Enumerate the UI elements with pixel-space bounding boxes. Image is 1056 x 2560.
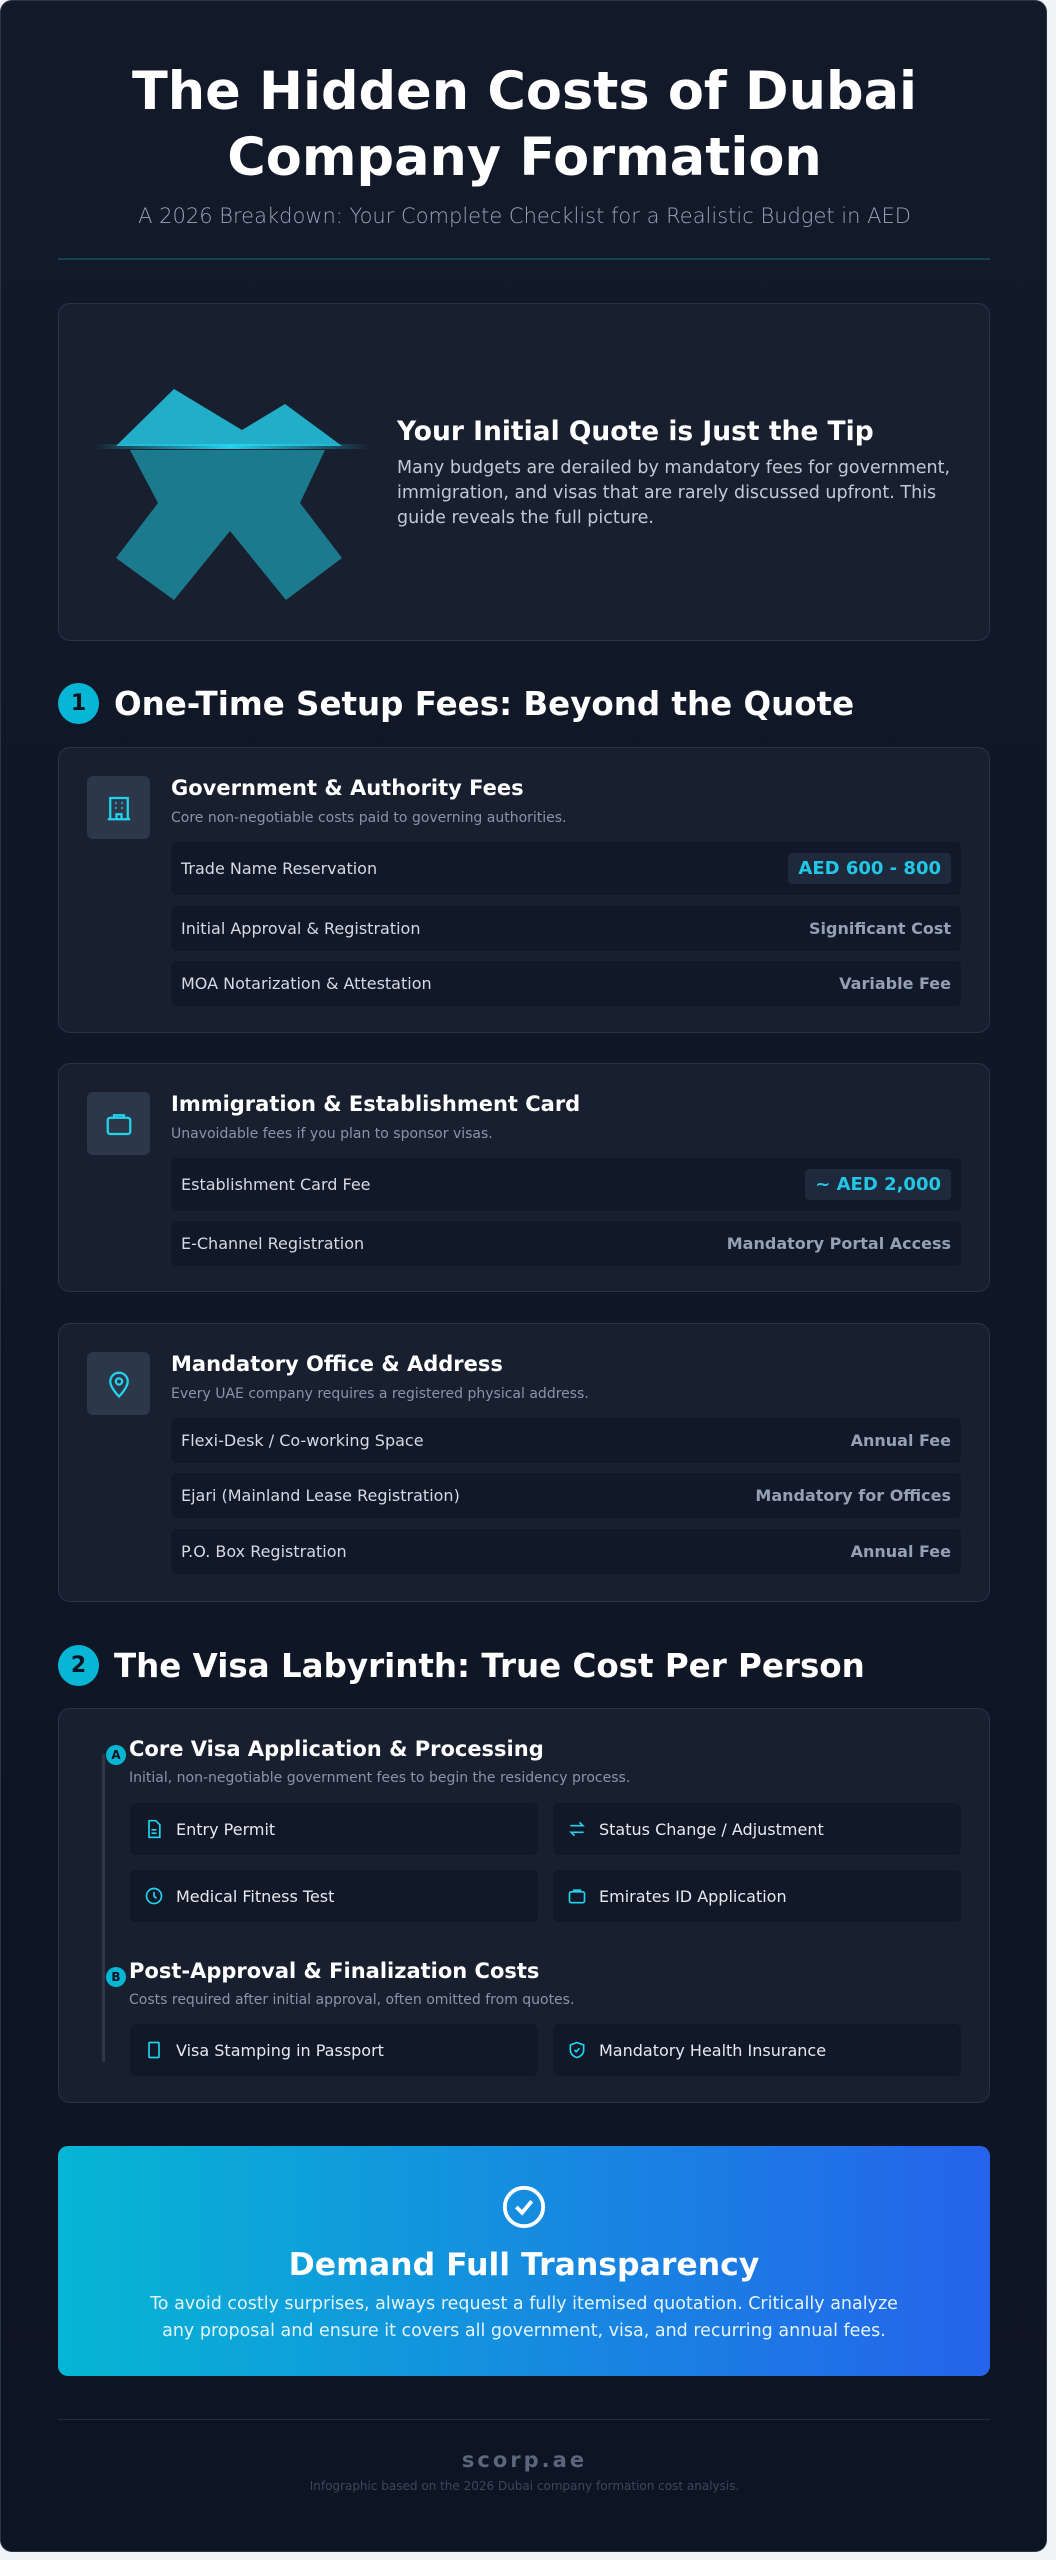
panel: immigration [58, 1063, 990, 1292]
footer: scorp.ae [462, 2448, 587, 2472]
subtitle: A 2026 Breakdown: Your Complete Checklist for a Realistic Budget in AED [138, 204, 911, 228]
panel: immigration: Establishment Card Fee [181, 1175, 371, 1194]
callout: transparency: Demand Full Transparency [289, 2247, 759, 2283]
panel: immigration: E-Channel Registration [181, 1234, 364, 1253]
hero text: Many budgets are derailed by mandatory fees for government, immigration, and visas that are rarely discussed upfront. This guide reveals the full picture. [397, 458, 950, 528]
title: The Hidden Costs of Dubai [132, 61, 917, 122]
icon: briefcase [87, 1092, 150, 1155]
icon: check [502, 2186, 546, 2228]
panel: government fees: Trade Name Reservation [181, 859, 377, 878]
panel: visa: Entry Permit [176, 1820, 275, 1838]
panel: visa: Mandatory Health Insurance [599, 2040, 826, 2060]
panel: visa: Status Change / Adjustment [599, 1820, 824, 1838]
panel: hero [58, 303, 990, 641]
panel: government fees: AED 600 - 800 [798, 858, 941, 879]
panel: visa: Initial, non-negotiable government fees to begin the residency process. [129, 1770, 630, 1786]
icon: building [87, 776, 150, 839]
panel: immigration: Unavoidable fees if you plan to sponsor visas. [171, 1126, 493, 1142]
marker A [106, 1745, 126, 1765]
panel: government fees: Core non-negotiable costs paid to governing authorities. [171, 810, 567, 826]
marker B [106, 1967, 126, 1987]
heading: section 1: One-Time Setup Fees: Beyond the Quote [114, 684, 854, 722]
panel: visa: Post-Approval & Finalization Costs [129, 1959, 539, 1983]
panel: visa: Medical Fitness Test [176, 1886, 334, 1906]
heading: section 1: 1 [71, 691, 86, 716]
footer [310, 2448, 739, 2493]
panel: office: Annual Fee [851, 1542, 951, 1561]
panel: government fees [58, 747, 990, 1033]
marker A: A [111, 1748, 121, 1762]
panel: office: P.O. Box Registration [181, 1542, 347, 1561]
panel: office: Annual Fee [851, 1431, 951, 1450]
callout: transparency [58, 2146, 990, 2376]
panel: office [58, 1323, 990, 1602]
panel: government fees: Initial Approval & Registration [181, 919, 420, 938]
panel: government fees: Significant Cost [809, 919, 951, 938]
panel: immigration: ~ AED 2,000 [815, 1174, 941, 1195]
panel: government fees: Government & Authority Fees [171, 776, 524, 800]
panel: office: Ejari (Mainland Lease Registration) [181, 1486, 460, 1505]
panel: visa: Emirates ID Application [599, 1886, 787, 1906]
panel: visa: Visa Stamping in Passport [176, 2040, 384, 2060]
panel: office: Mandatory for Offices [755, 1486, 951, 1505]
footer: Infographic based on the 2026 Dubai company formation cost analysis. [310, 2479, 739, 2493]
heading: section 2: 2 [71, 1653, 86, 1678]
panel: visa: Core Visa Application & Processing [129, 1737, 544, 1761]
title [132, 61, 917, 188]
hero heading: Your Initial Quote is Just the Tip [397, 416, 874, 447]
title: Company Formation [227, 127, 822, 188]
marker B: B [111, 1970, 121, 1984]
panel: office: Mandatory Office & Address [171, 1352, 503, 1376]
panel: immigration: Immigration & Establishment Card [171, 1092, 580, 1116]
panel: government fees: Variable Fee [839, 974, 951, 993]
icon: iceberg [99, 389, 363, 600]
panel: visa: Costs required after initial approval, often omitted from quotes. [129, 1992, 574, 2008]
icon: pin [87, 1352, 150, 1415]
heading: section 2: The Visa Labyrinth: True Cost Per Person [114, 1646, 865, 1684]
panel: office: Flexi-Desk / Co-working Space [181, 1431, 424, 1450]
panel: visa [58, 1708, 990, 2103]
panel: immigration: Mandatory Portal Access [727, 1234, 951, 1253]
panel: office: Every UAE company requires a registered physical address. [171, 1386, 589, 1402]
callout: transparency: To avoid costly surprises, always request a fully itemised quotation. Critically analyze any proposal and ensure it covers all government, visa, and recurring annual fees. [150, 2294, 898, 2341]
panel: government fees: MOA Notarization & Attestation [181, 974, 432, 993]
